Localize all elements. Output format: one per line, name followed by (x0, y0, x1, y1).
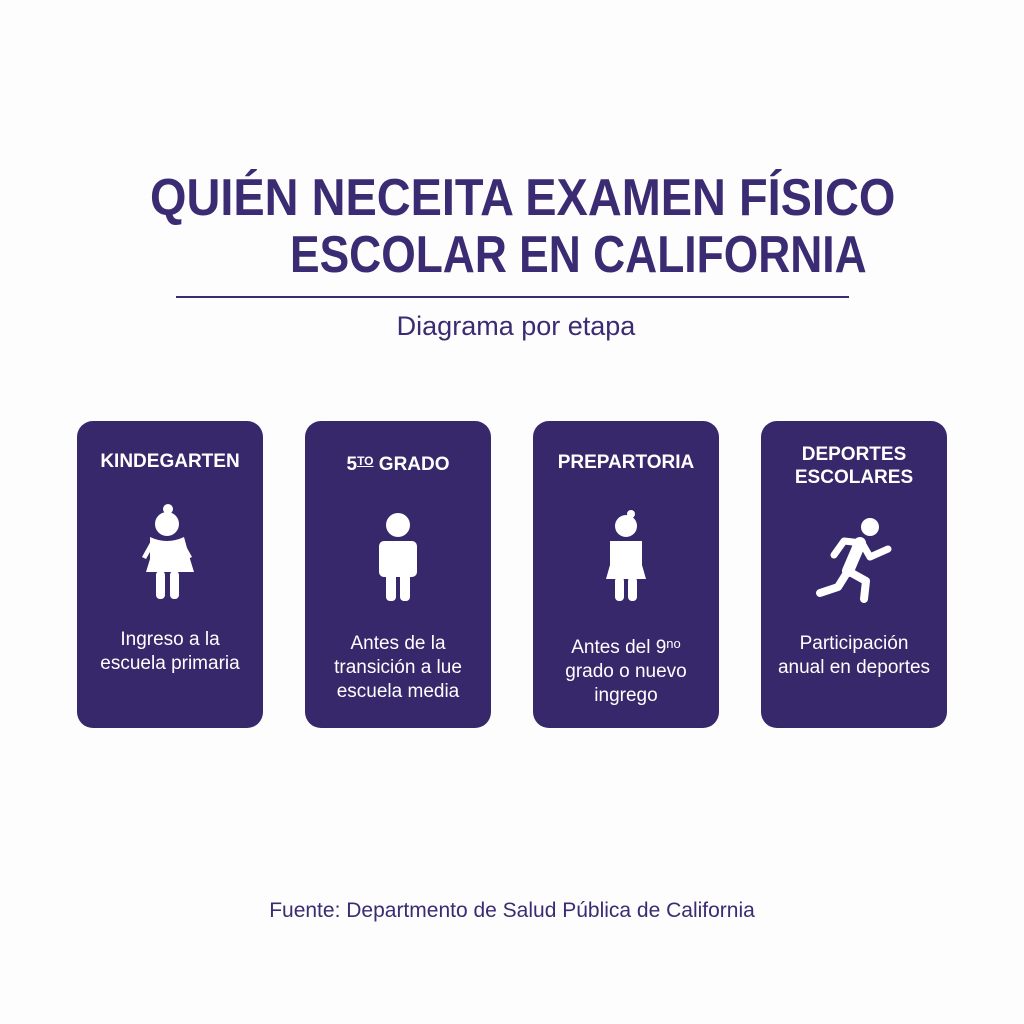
panel: deportes escolares: Participación (800, 633, 908, 654)
title (150, 169, 895, 284)
panel: deportes escolares: ESCOLARES (795, 467, 913, 488)
title: QUIÉN NECEITA EXAMEN FÍSICO (150, 169, 895, 227)
panel: preparatoria: ingrego (594, 685, 658, 706)
panel: 5to grado: escuela media (337, 681, 459, 702)
title: ESCOLAR EN CALIFORNIA (290, 226, 867, 284)
panel: deportes escolares: anual en deportes (778, 657, 930, 678)
source: Fuente: Departmento de Salud Pública de California (269, 899, 755, 922)
subtitle: Diagrama por etapa (397, 311, 635, 341)
panel: 5to grado: Antes de la (350, 633, 446, 654)
icon: girl (142, 504, 194, 599)
panel: deportes escolares (761, 421, 947, 728)
panel: preparatoria: Antes del 9no (571, 636, 681, 658)
icon: boy (379, 513, 417, 601)
panel: 5to grado: transición a lue (334, 657, 462, 678)
panel: kindergarten: Ingreso a la (120, 629, 220, 650)
panel: preparatoria: PREPARTORIA (558, 452, 694, 473)
panel: preparatoria (533, 421, 719, 728)
panel: kindergarten: KINDEGARTEN (100, 451, 240, 472)
panel: 5to grado (305, 421, 491, 728)
panel: preparatoria: grado o nuevo (565, 661, 687, 682)
panel: deportes escolares: DEPORTES (802, 444, 906, 465)
panel: 5to grado: 5TO GRADO (346, 454, 450, 475)
icon: teen (606, 510, 646, 601)
panel: kindergarten: escuela primaria (100, 653, 240, 674)
icon: runner (816, 518, 892, 603)
panel: kindergarten (77, 421, 263, 728)
